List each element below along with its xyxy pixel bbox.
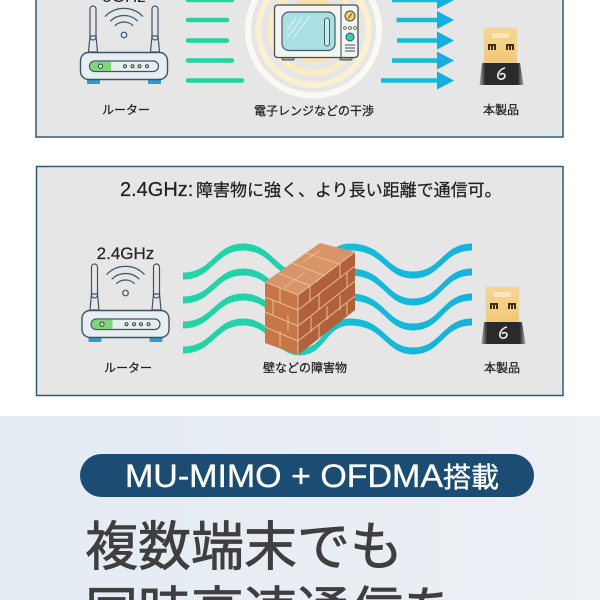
panel heading: 2.4GHz: (120, 179, 193, 201)
label: product: 本製品 (484, 361, 520, 375)
panel background (36, 166, 563, 396)
icon: USB adapter (480, 28, 524, 85)
icon: brick wall (265, 243, 355, 355)
icon: router (82, 264, 169, 342)
label: 2.4GHz: 2.4GHz (97, 244, 154, 263)
green signal lines (188, 0, 242, 80)
signal waves (183, 247, 472, 352)
panel: 5GHz interference (36, 0, 563, 137)
headline: 複数端末でも (85, 518, 403, 577)
panel: MU-MIMO section (0, 416, 600, 600)
badge: MU-MIMO + OFDMA: MU-MIMO + OFDMA (125, 458, 444, 494)
label: product: 本製品 (483, 103, 519, 117)
badge: MU-MIMO + OFDMA (80, 454, 534, 497)
label: router: ルーター (102, 103, 150, 117)
blue signal arrows (381, 0, 454, 90)
label: obstacle: 壁などの障害物 (263, 361, 347, 375)
icon: router (80, 6, 168, 84)
label: interference: 電子レンジなどの干渉 (254, 103, 374, 118)
badge: MU-MIMO + OFDMA: 搭載 (443, 462, 499, 493)
panel: 2.4GHz obstacles (36, 166, 563, 396)
section background (0, 416, 600, 600)
icon: USB adapter (482, 287, 526, 344)
headline (85, 518, 456, 600)
panel background (36, 0, 563, 137)
icon: microwave with interference rings (248, 0, 379, 96)
panel heading: 障害物に強く、より長い距離で通信可。 (196, 181, 502, 200)
label: router: ルーター (104, 361, 152, 375)
